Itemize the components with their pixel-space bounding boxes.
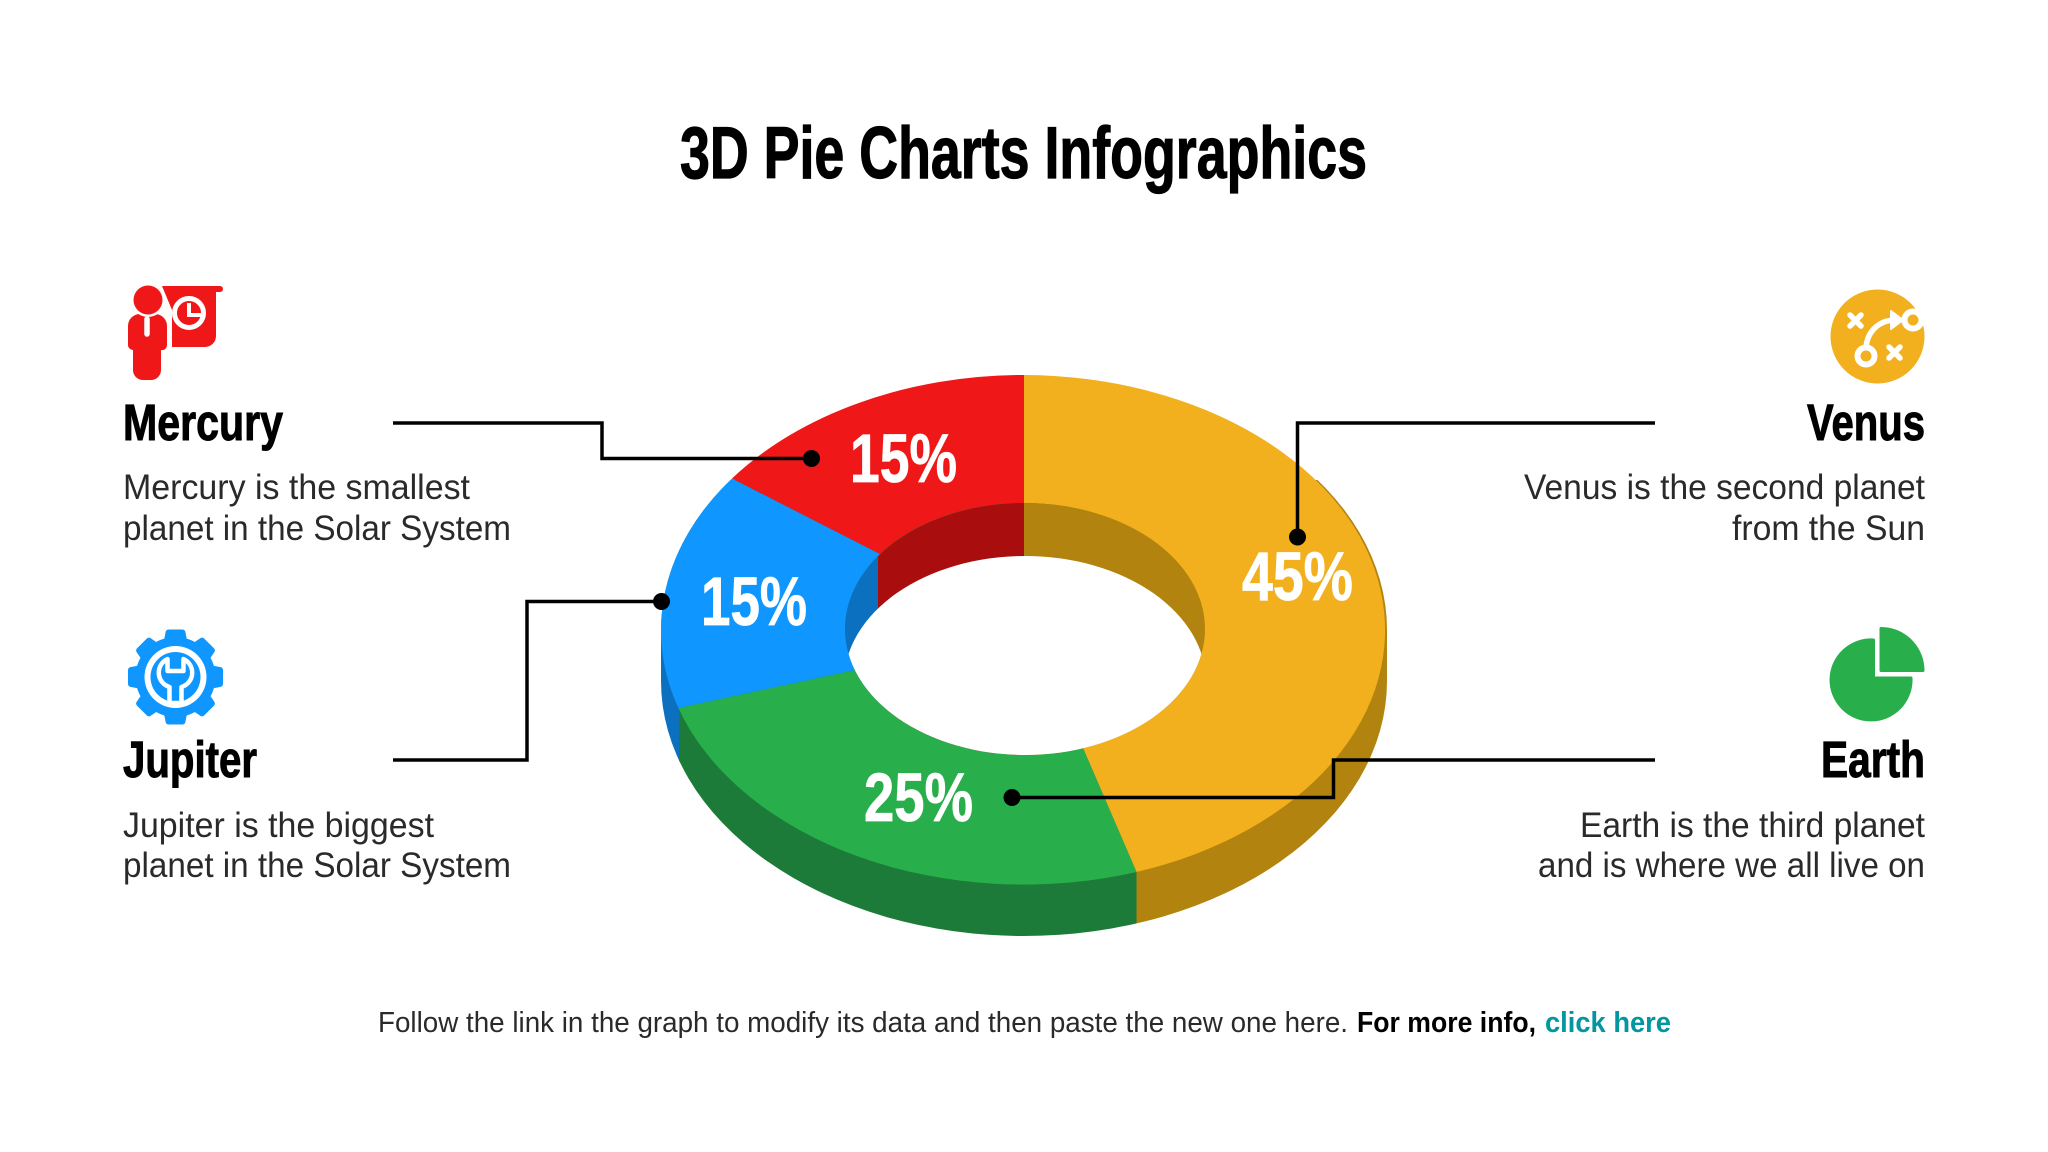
block: Jupiter [123,731,511,885]
footer note: click here [1545,1007,1671,1039]
connector: Earth [1004,760,1655,806]
block: Venus: Venus is the second planet [1524,468,1925,507]
footer note: Follow the link in the graph to modify its data and then paste the new one here. [378,1007,1348,1039]
block: Jupiter: planet in the Solar System [123,846,511,885]
block: Venus: from the Sun [1732,509,1925,548]
icon: presenter with chart (Mercury) [128,286,223,380]
3D donut chart [655,375,1396,960]
outer side walls [655,480,1396,960]
slice: yellow 45% [1024,375,1385,872]
block: Earth: Earth is the third planet [1580,806,1925,845]
connector: Venus [1289,423,1655,546]
block: Mercury: Mercury [123,394,284,451]
footer note: For more info, [1357,1007,1536,1039]
label: 15% red: 15% [850,420,957,497]
connector: Mercury [393,423,820,467]
label: 45% yellow: 45% [1242,538,1353,615]
slice: blue 15% [661,478,880,708]
block: Mercury [123,394,511,548]
block: Earth [1538,731,1925,885]
label: 25% green: 25% [864,759,973,836]
inner wall and hole [845,503,1205,755]
icon: playbook (Venus) [1830,290,1924,384]
slice: green 25% [678,670,1136,885]
block: Venus: Venus [1807,394,1925,451]
connector: Jupiter [393,593,670,760]
block: Venus [1524,394,1925,548]
block: Earth: and is where we all live on [1538,846,1925,885]
label: 15% blue: 15% [701,563,807,640]
slice: red 15% [732,375,1024,554]
block: Jupiter: Jupiter [123,731,257,788]
icon: gear with wrench (Jupiter) [128,630,223,724]
block: Mercury: planet in the Solar System [123,509,511,548]
block: Mercury: Mercury is the smallest [123,468,470,507]
title: 3D Pie Charts Infographics [680,113,1367,194]
block: Jupiter: Jupiter is the biggest [123,806,434,845]
block: Earth: Earth [1821,731,1925,788]
icon: pie chart (Earth) [1831,628,1923,720]
